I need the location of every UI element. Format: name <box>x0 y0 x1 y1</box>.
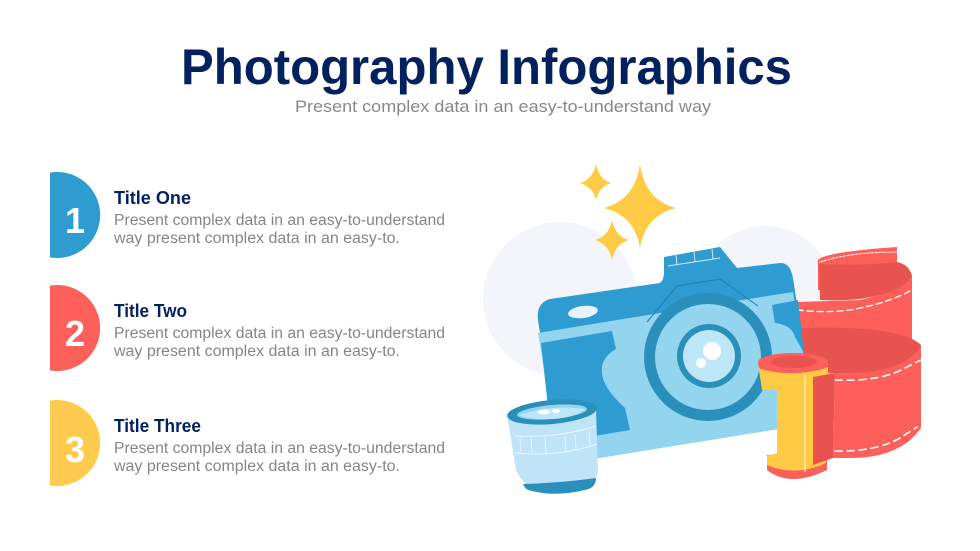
item 3 heading: Title Three <box>114 416 201 436</box>
icon: sparkles <box>580 164 676 260</box>
item 3 body text <box>113 440 445 475</box>
camera illustration <box>483 164 921 494</box>
lens <box>644 293 772 421</box>
number badge 3: 3 <box>65 429 85 470</box>
film strip <box>797 247 921 458</box>
title: Photography Infographics <box>181 39 792 95</box>
item 3 body text: Present complex data in an easy-to-understand <box>114 440 445 457</box>
item 2 body text <box>113 325 445 360</box>
item 1 <box>50 172 445 258</box>
item 2 heading: Title Two <box>114 301 187 321</box>
item 2 body text: way present complex data in an easy-to. <box>113 343 400 360</box>
item 1 heading: Title One <box>114 188 191 208</box>
item 3 body text: way present complex data in an easy-to. <box>113 458 400 475</box>
number badge 2 <box>50 285 100 371</box>
number badge 1: 1 <box>65 200 85 241</box>
camera body <box>538 247 815 464</box>
item 1 body text <box>113 212 445 247</box>
item 1 body text: Present complex data in an easy-to-understand <box>114 212 445 229</box>
number badge 1 <box>50 172 100 258</box>
film canister <box>758 353 835 479</box>
subtitle: Present complex data in an easy-to-understand way <box>295 97 712 116</box>
number badge 3 <box>50 400 100 486</box>
item 2 <box>50 285 445 371</box>
background circles <box>483 222 835 376</box>
item 1 body text: way present complex data in an easy-to. <box>113 230 400 247</box>
item 2 body text: Present complex data in an easy-to-understand <box>114 325 445 342</box>
number badge 2: 2 <box>65 313 85 354</box>
lens barrel <box>506 396 598 494</box>
item 3 <box>50 400 445 486</box>
